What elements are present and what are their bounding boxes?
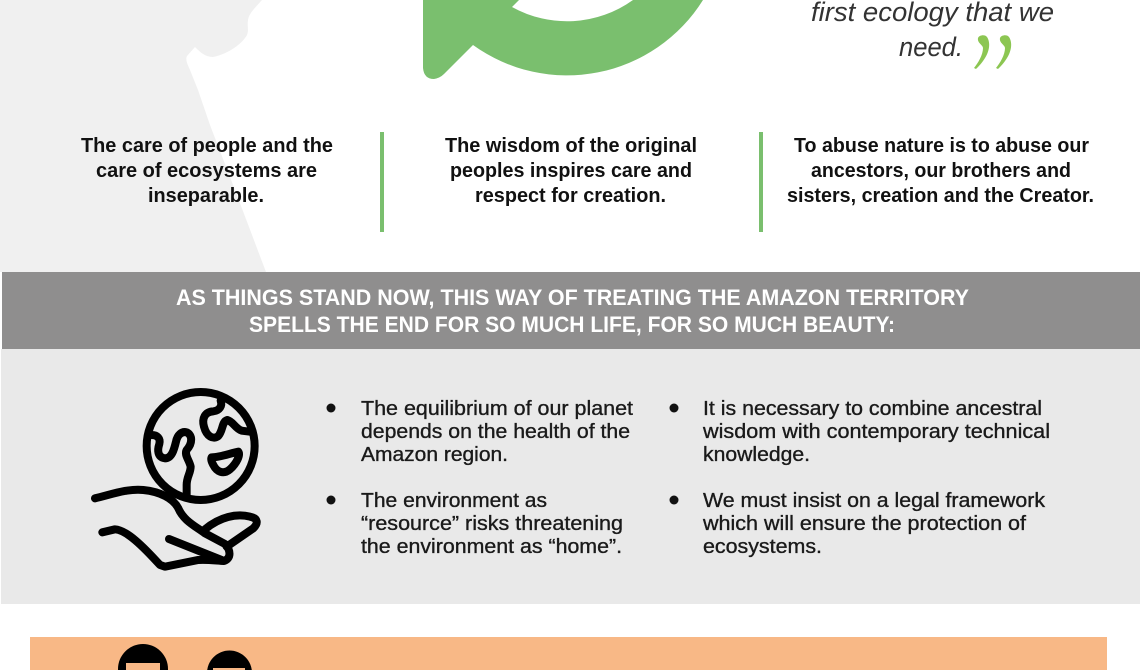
icon: person head right [207,650,252,670]
list: left column: “resource” risks threatening [361,513,623,535]
list: left column: The equilibrium of our planet [361,398,633,420]
icon: person head left [118,644,168,670]
divider: left [380,132,384,232]
icon: globe in hand [95,392,257,567]
list: left column: depends on the health of the [361,421,630,443]
list: right column: We must insist on a legal framework [703,490,1046,512]
text block: wisdom of original peoples: respect for creation. [475,185,666,207]
panel: Amazon key points [1,349,1140,604]
list: right column [670,398,1050,558]
text block: wisdom of original peoples: peoples inspires care and [450,160,692,182]
text block: abuse of nature: ancestors, our brothers and [811,160,1071,182]
list: right column: It is necessary to combine ancestral [703,398,1042,420]
list: left column: The environment as [361,490,547,512]
text block: abuse of nature: To abuse nature is to abuse our [794,135,1089,157]
banner heading: SPELLS THE END FOR SO MUCH LIFE, FOR SO MUCH BEAUTY: [249,312,895,337]
text block: care of people: The care of people and the [81,135,333,157]
list: left column: the environment as “home”. [361,536,622,558]
divider: right [759,132,763,232]
background silhouette [0,0,266,272]
list: right column: wisdom with contemporary technical [702,421,1050,443]
text block: care of people [81,135,333,207]
list: right column: ecosystems. [703,536,822,558]
text block: wisdom of original peoples: The wisdom of the original [445,135,697,157]
icon: green cycle arrow [423,0,703,79]
list: left column: Amazon region. [361,444,508,466]
quote text [811,0,1054,69]
list: right column: which will ensure the protection of [702,513,1026,535]
text block: abuse of nature [787,135,1094,207]
text block: care of people: care of ecosystems are [96,160,317,182]
list: right column: knowledge. [703,444,810,466]
list: left column [326,398,633,558]
icon: closing quotation mark [974,35,1011,69]
panel: orange footer [30,637,1107,670]
banner heading [2,272,1140,349]
text block: abuse of nature: sisters, creation and the Creator. [787,185,1094,207]
text block: wisdom of original peoples [445,135,697,207]
quote text: need. [899,32,963,62]
text block: care of people: inseparable. [148,185,264,207]
banner heading: AS THINGS STAND NOW, THIS WAY OF TREATING THE AMAZON TERRITORY [176,285,969,310]
